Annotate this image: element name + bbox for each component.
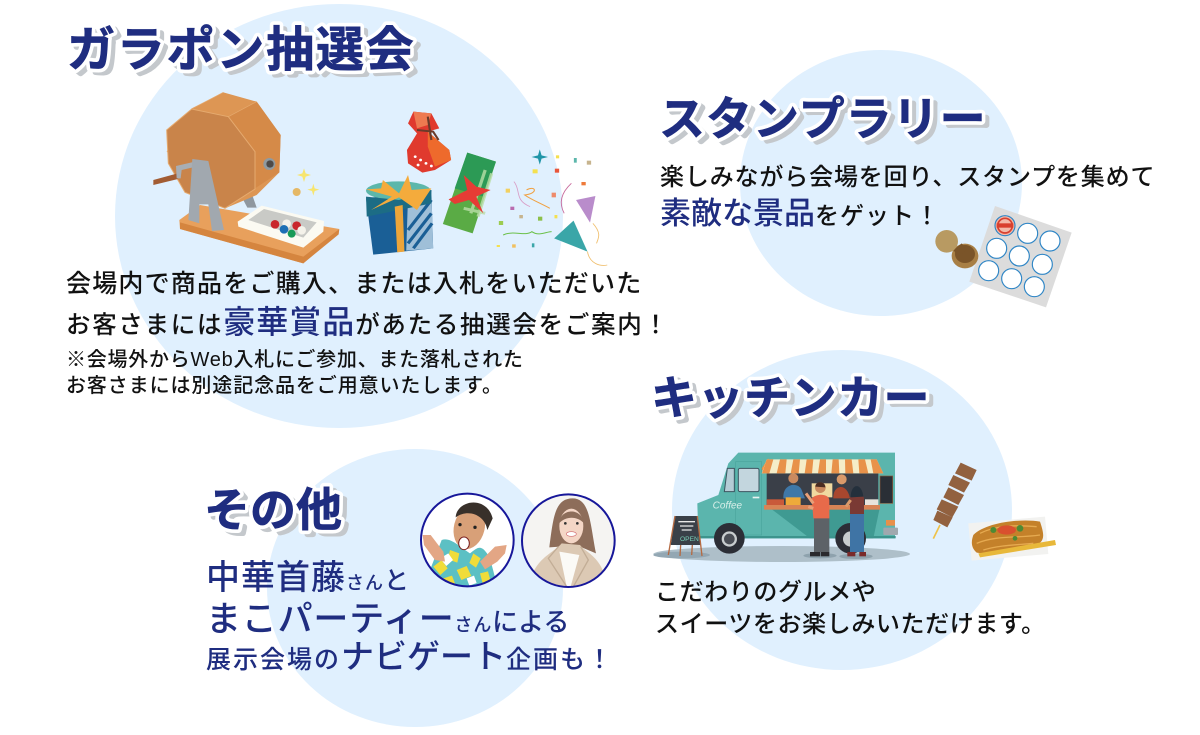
panel: background circle kitchen car bbox=[672, 350, 1012, 670]
text: kitchen car description: こだわりのグルメや bbox=[655, 579, 876, 606]
photo: Chuka Shuto portrait bbox=[421, 494, 514, 590]
icon: blue gift bbox=[366, 175, 433, 255]
text: stamp rally description bbox=[660, 164, 1155, 231]
panel: background circle other bbox=[267, 449, 563, 727]
icon: sign board bbox=[668, 516, 702, 556]
text: lottery note: ※会場外からWeb入札にご参加、また落札された bbox=[66, 348, 524, 371]
icon: red pouch bbox=[407, 112, 451, 173]
heading: kitchen car: キッチンカー bbox=[651, 372, 930, 424]
heading: other: その他 bbox=[204, 484, 342, 536]
icon: stamp card bbox=[969, 206, 1072, 307]
icon: customers bbox=[803, 482, 873, 559]
icon: yakisoba bbox=[968, 517, 1056, 561]
heading: lottery: ガラポン抽選会 bbox=[72, 28, 421, 81]
heading: stamp rally: スタンプラリー bbox=[659, 93, 987, 145]
text: navigator description: まこパーティーさんによる bbox=[206, 600, 569, 639]
text: navigator description bbox=[206, 559, 614, 675]
text: kitchen car description: スイーツをお楽しみいただけます。 bbox=[655, 611, 1046, 638]
heading: other: その他 bbox=[204, 484, 342, 536]
icon: gifts bbox=[366, 112, 496, 255]
text: lottery note bbox=[66, 348, 524, 397]
panel: background circle stamp rally bbox=[740, 50, 1022, 316]
text: lottery description: 会場内で商品をご購入、または入札をいただいた bbox=[66, 270, 642, 298]
photo: Mako Party portrait bbox=[522, 494, 615, 588]
icon: skewer bbox=[933, 463, 977, 539]
icon: food truck: Coffee bbox=[713, 500, 743, 511]
text: navigator description: 中華首藤さんと bbox=[206, 559, 410, 597]
heading: kitchen car: キッチンカー bbox=[651, 372, 930, 424]
icon: stamp and card bbox=[935, 206, 1072, 307]
text: lottery description: お客さまには豪華賞品があたる抽選会をご案内！ bbox=[66, 304, 670, 340]
icon: lottery machine bbox=[153, 92, 339, 263]
icon: food truck bbox=[653, 453, 910, 562]
icon: wooden stamp bbox=[935, 230, 978, 268]
text: navigator description: 展示会場のナビゲート企画も！ bbox=[206, 638, 614, 675]
text: stamp rally description: 楽しみながら会場を回り、スタンプを集めて bbox=[660, 164, 1155, 191]
heading: lottery: ガラポン抽選会 bbox=[67, 24, 416, 77]
icon: confetti party popper bbox=[497, 149, 607, 265]
heading: kitchen car: キッチンカー bbox=[656, 376, 935, 428]
icon: green gift bbox=[443, 153, 496, 233]
text: stamp rally description: 素敵な景品をゲット！ bbox=[660, 196, 940, 231]
text: lottery description bbox=[66, 270, 670, 340]
heading: lottery: ガラポン抽選会 bbox=[67, 24, 416, 77]
heading: stamp rally: スタンプラリー bbox=[664, 97, 992, 149]
icon: sign board: OPEN bbox=[680, 536, 699, 543]
text: lottery note: お客さまには別途記念品をご用意いたします。 bbox=[66, 374, 503, 397]
heading: stamp rally: スタンプラリー bbox=[659, 93, 987, 145]
heading: other: その他 bbox=[209, 488, 347, 540]
text: kitchen car description bbox=[655, 579, 1046, 638]
panel: background circle lottery bbox=[115, 4, 563, 428]
